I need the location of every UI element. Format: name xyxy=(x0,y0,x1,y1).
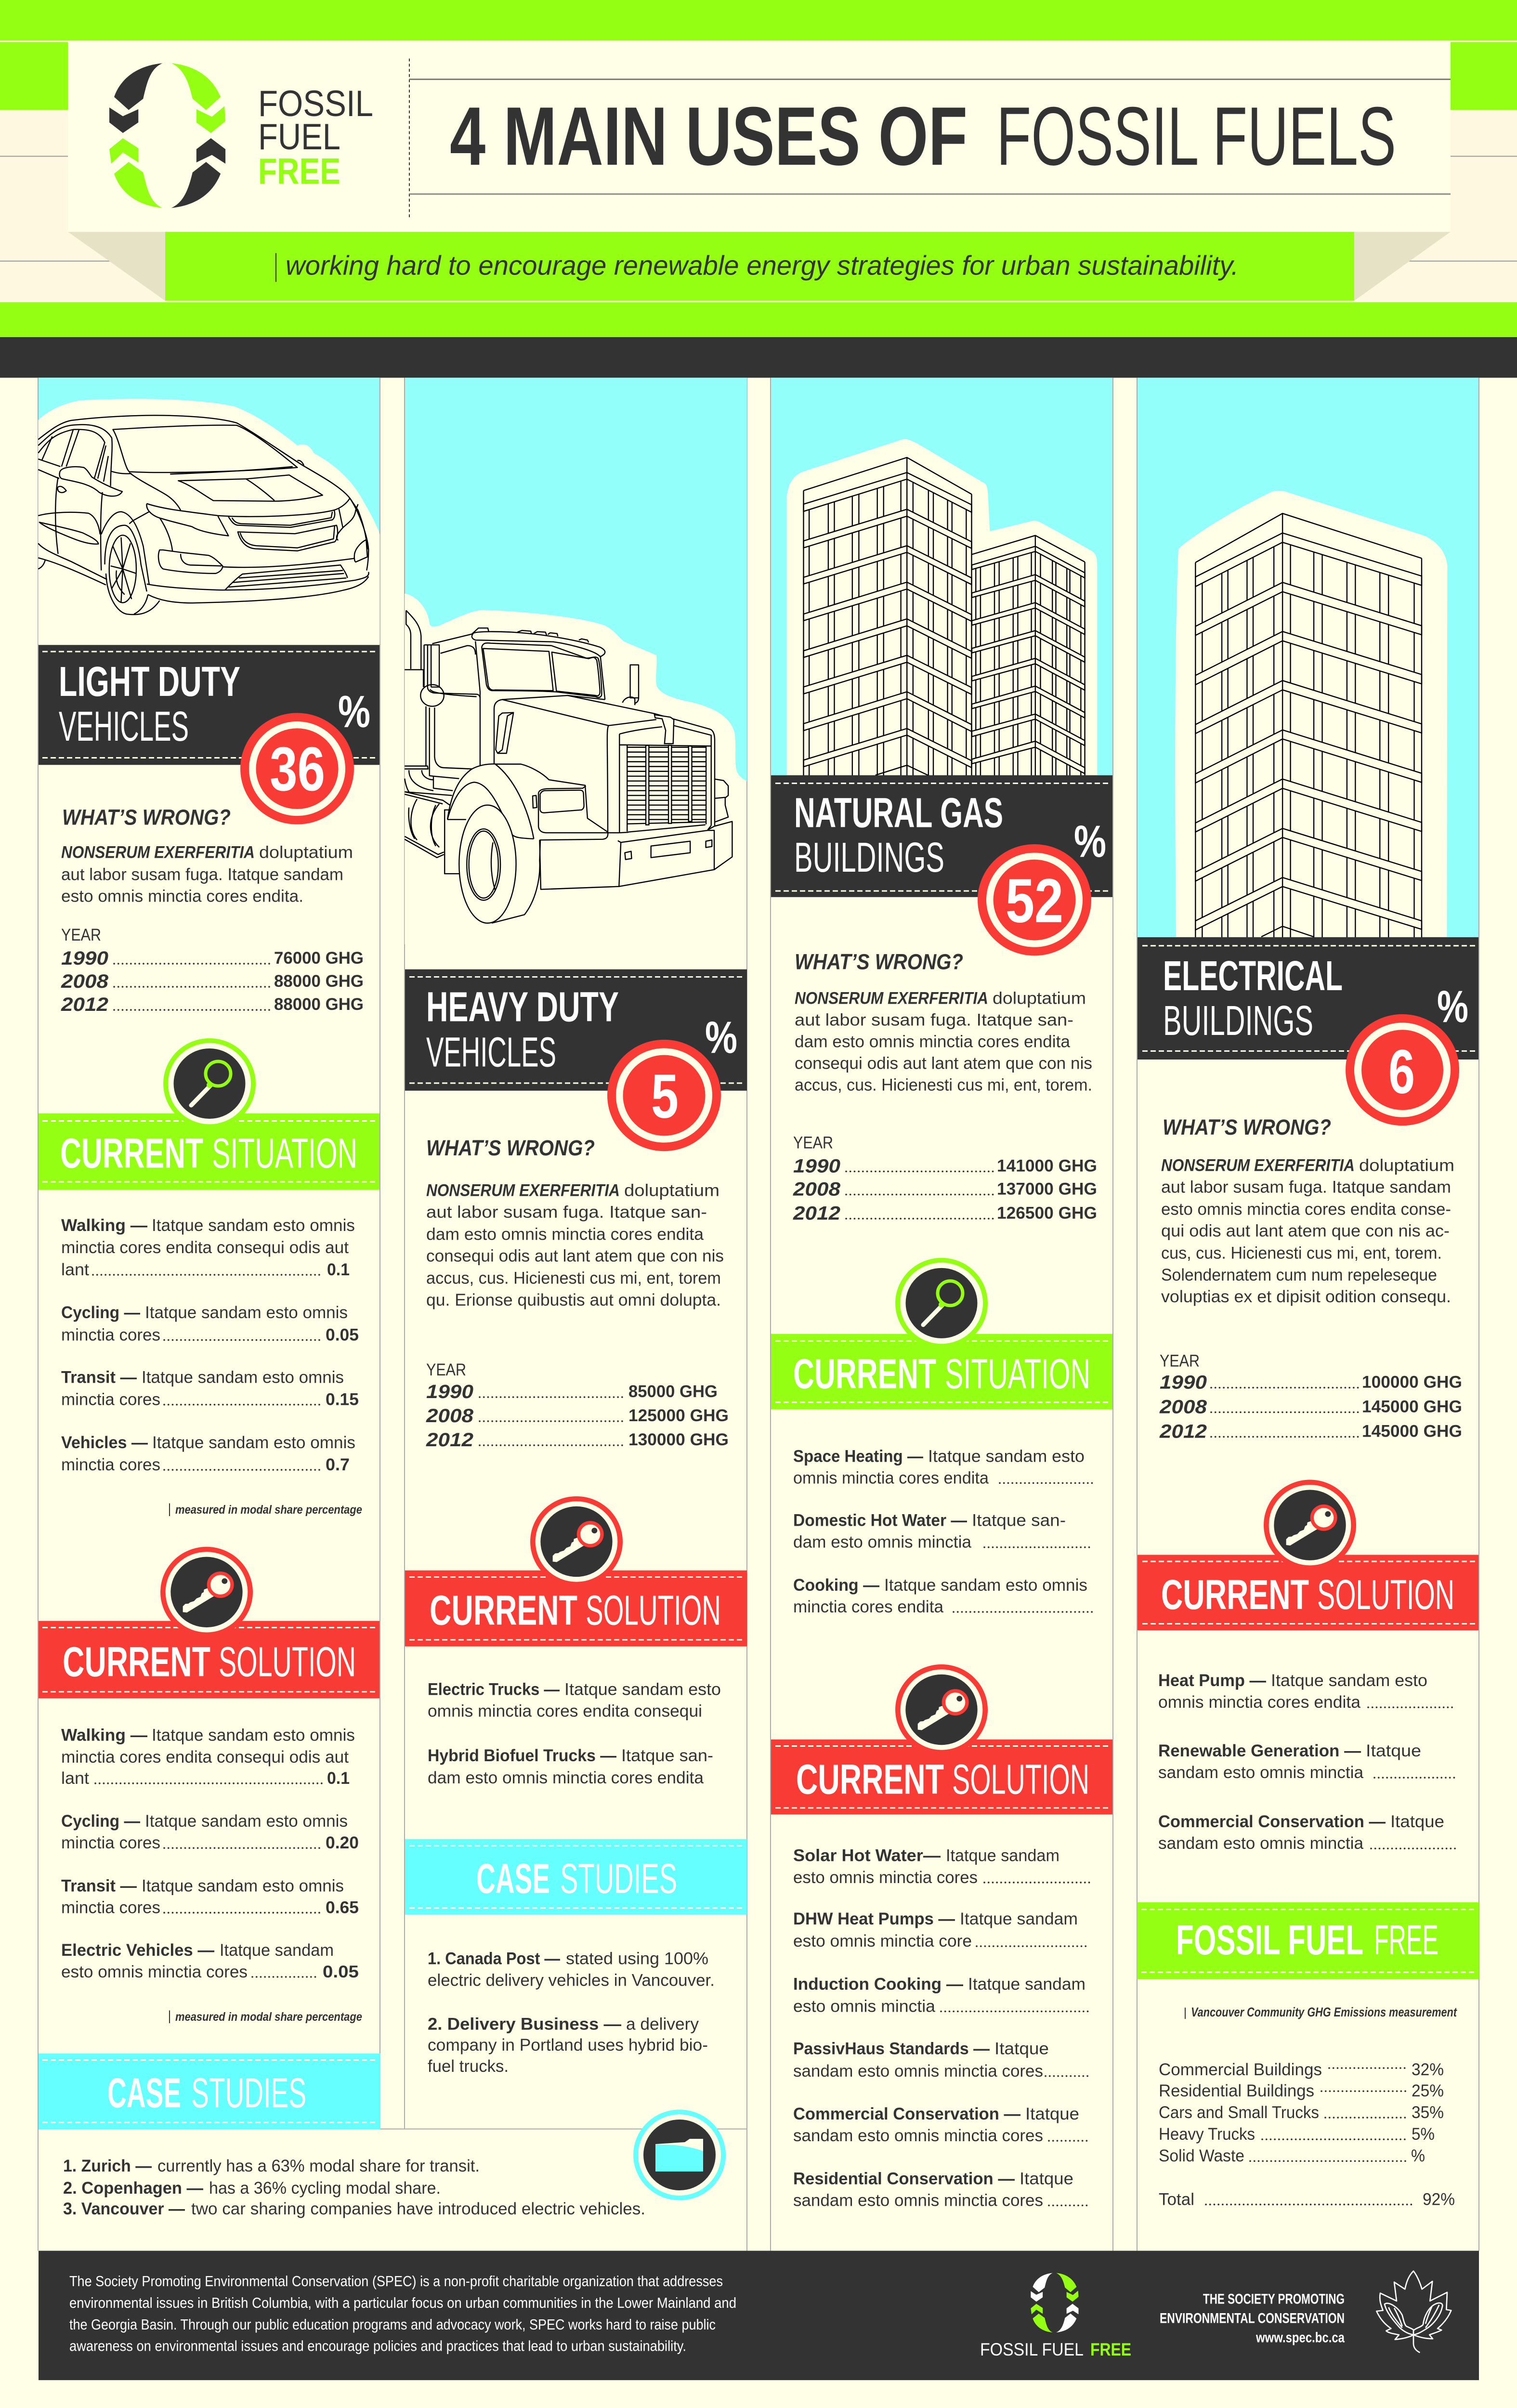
list: current situation: Transit — xyxy=(61,1368,137,1387)
text block: what's wrong: WHAT’S WRONG? xyxy=(1163,1115,1331,1139)
logo wordmark xyxy=(258,83,373,192)
footer text: about SPEC: awareness on environmental issues and encourage policies and practices that lead to urban sustainability. xyxy=(69,2338,686,2354)
footer organisation name: ENVIRONMENTAL CONSERVATION xyxy=(1160,2311,1345,2326)
list: current solution: Itatque sandam esto omnis xyxy=(152,1726,355,1745)
icon: maple leaf xyxy=(1376,2271,1451,2353)
note: emissions measurement: Vancouver Community GHG Emissions measurement xyxy=(1191,2005,1457,2019)
list: current solution: Commercial Conservation — xyxy=(1158,1812,1386,1831)
note: modal share: measured in modal share percentage xyxy=(175,1504,362,1517)
column borders xyxy=(38,378,1479,2251)
text block: what's wrong: aut labor susam fuga. Itatque san- xyxy=(426,1203,707,1221)
list: current situation: omnis minctia cores endita xyxy=(793,1468,989,1487)
table: GHG by year: YEAR xyxy=(426,1360,466,1379)
list: current situation: Cycling — xyxy=(61,1303,140,1322)
illustration: truck xyxy=(405,378,747,944)
text block: what's wrong: NONSERUM EXERFERITIA xyxy=(61,843,255,862)
list: current situation: Itatque san- xyxy=(972,1511,1066,1530)
stat: 36 percent xyxy=(240,713,354,824)
list: current solution: esto omnis minctia cores xyxy=(793,1868,978,1887)
table: GHG by year xyxy=(426,1360,729,1451)
footer text: about SPEC xyxy=(69,2273,736,2354)
stat: 52 percent xyxy=(978,844,1091,955)
list: current solution: 0.05 xyxy=(323,1962,359,1981)
heading banner: electrical buildings: BUILDINGS xyxy=(1163,997,1313,1044)
list: current situation: minctia cores xyxy=(61,1390,160,1409)
stat: 6 percent: 6 xyxy=(1388,1037,1415,1106)
list: current solution xyxy=(1158,1671,1457,1853)
list: current situation: Itatque sandam esto omnis xyxy=(142,1368,344,1387)
heading banner: heavy duty vehicles: HEAVY DUTY xyxy=(426,983,619,1030)
section heading: current situation xyxy=(771,1334,1112,1409)
section heading: fossil fuel free: FOSSIL FUEL xyxy=(1176,1916,1363,1963)
table: emissions shares: Total xyxy=(1159,2190,1194,2209)
table: GHG by year: 141000 GHG xyxy=(997,1156,1097,1175)
section heading: current solution xyxy=(39,1621,379,1698)
heading banner: natural gas buildings: % xyxy=(1074,816,1106,867)
list: current situation: 0.7 xyxy=(326,1455,350,1474)
icon: magnifier xyxy=(163,1038,256,1129)
list: current solution: Itatque sandam xyxy=(968,1975,1085,1993)
list: current solution: Itatque xyxy=(994,2039,1049,2058)
section heading: current solution: CURRENT xyxy=(1161,1571,1309,1618)
logo wordmark: FREE xyxy=(258,151,340,192)
table: GHG by year: 88000 GHG xyxy=(274,971,364,991)
heading banner: natural gas buildings: NATURAL GAS xyxy=(794,789,1003,836)
table: GHG by year: 2008 xyxy=(426,1404,473,1426)
list: current situation: minctia cores xyxy=(61,1325,160,1344)
list: current solution: Itatque sandam esto xyxy=(1271,1671,1427,1690)
tagline banner xyxy=(165,232,1354,301)
tagline banner: working hard to encourage renewable energy strategies for urban sustainability. xyxy=(286,250,1239,281)
section heading: current solution: CURRENT xyxy=(796,1755,944,1803)
list: current solution: Induction Cooking — xyxy=(793,1975,963,1993)
list: current solution: Transit — xyxy=(61,1876,137,1895)
panel: electrical buildings xyxy=(1137,378,1479,2209)
list: current situation: Itatque sandam esto omnis xyxy=(884,1575,1087,1595)
list: current solution: Itatque san- xyxy=(621,1746,713,1765)
list: current situation: Domestic Hot Water — xyxy=(793,1511,967,1530)
text block: what's wrong: WHAT’S WRONG? xyxy=(426,1136,595,1160)
icon: magnifier xyxy=(895,1258,988,1348)
list: case studies xyxy=(63,2156,645,2218)
list: current solution: PassivHaus Standards — xyxy=(793,2039,990,2058)
table: GHG by year: 125000 GHG xyxy=(628,1406,729,1425)
table: emissions shares: 5% xyxy=(1412,2124,1435,2144)
table: emissions shares: Residential Buildings xyxy=(1159,2081,1314,2100)
table: emissions shares: Commercial Buildings xyxy=(1159,2060,1322,2079)
icon: key xyxy=(530,1496,623,1587)
stat: 5 percent: 5 xyxy=(651,1061,679,1131)
footer wordmark: FOSSIL FUEL xyxy=(980,2340,1084,2359)
list: current solution: sandam esto omnis minctia cores xyxy=(793,2126,1043,2145)
list: current solution: Itatque xyxy=(1020,2169,1073,2188)
list: current situation: Itatque sandam esto omnis xyxy=(152,1216,355,1235)
table: GHG by year: 85000 GHG xyxy=(628,1382,718,1401)
table: emissions shares xyxy=(1159,2060,1455,2209)
panel: heavy duty vehicles xyxy=(405,378,747,2076)
logo: fossil fuel free xyxy=(109,63,373,208)
table: GHG by year: YEAR xyxy=(1160,1351,1200,1370)
list: current solution: Itatque sandam xyxy=(220,1940,334,1960)
table: GHG by year xyxy=(793,1133,1097,1224)
footer text: about SPEC: the Georgia Basin. Through our public education programs and advocacy work, SPEC works hard to raise public xyxy=(69,2316,716,2333)
icon: logo arrows xyxy=(109,63,225,208)
section heading: current solution xyxy=(405,1570,747,1647)
table: emissions shares: 35% xyxy=(1412,2103,1444,2122)
table: GHG by year: 145000 GHG xyxy=(1362,1397,1462,1416)
text block: what's wrong: NONSERUM EXERFERITIA xyxy=(795,989,988,1008)
section heading: current solution xyxy=(771,1740,1112,1815)
section heading: case studies: STUDIES xyxy=(560,1855,677,1902)
table: GHG by year: 2012 xyxy=(1159,1420,1207,1442)
text block: what's wrong: aut labor susam fuga. Itatque sandam xyxy=(61,865,343,884)
list: case studies: 2. Copenhagen — xyxy=(63,2178,203,2198)
footer xyxy=(39,2251,1479,2380)
table: GHG by year: 137000 GHG xyxy=(997,1179,1097,1198)
list: current solution: Itatque sandam esto omnis xyxy=(145,1811,348,1831)
text block: what's wrong: WHAT’S WRONG? xyxy=(62,805,231,830)
list: case studies: 1. Canada Post — xyxy=(428,1949,560,1968)
text block: what's wrong: cus, cus. Hicienesti cus mi, ent, torem. xyxy=(1161,1243,1442,1263)
list: current solution: Cycling — xyxy=(61,1811,140,1831)
illustration: tower xyxy=(1138,378,1478,938)
text block: what's wrong: qu. Erionse quibustis aut omni dolupta. xyxy=(426,1290,721,1309)
table: emissions shares: Cars and Small Trucks xyxy=(1159,2103,1319,2122)
list: current situation: Vehicles — xyxy=(61,1433,148,1452)
text block: what's wrong: doluptatium xyxy=(624,1181,719,1200)
list: current solution: sandam esto omnis minctia xyxy=(1158,1834,1363,1853)
list: current solution: sandam esto omnis minctia cores xyxy=(793,2061,1043,2081)
list: current solution xyxy=(793,1846,1090,2210)
list: current situation: lant xyxy=(61,1260,89,1279)
table: GHG by year: YEAR xyxy=(61,925,101,944)
text block: what's wrong: doluptatium xyxy=(993,989,1086,1008)
list: current situation: Cooking — xyxy=(793,1575,879,1595)
list: current situation: minctia cores xyxy=(61,1455,160,1474)
note: modal share second: measured in modal share percentage xyxy=(175,2011,362,2024)
footer text: about SPEC: The Society Promoting Environmental Conservation (SPEC) is a non-profit charitable organization that addresses xyxy=(69,2273,723,2290)
list: current solution: esto omnis minctia cores xyxy=(61,1962,248,1981)
list: case studies: stated using 100% xyxy=(566,1949,708,1968)
list: current solution: Itatque xyxy=(1390,1812,1444,1831)
list: current solution: Electric Vehicles — xyxy=(61,1940,214,1960)
icon: folder xyxy=(633,2109,726,2200)
list: current situation: Walking — xyxy=(61,1216,147,1235)
list: current solution: Itatque sandam xyxy=(960,1909,1078,1928)
list: current situation xyxy=(61,1216,359,1474)
list: current situation: minctia cores endita consequi odis aut xyxy=(61,1238,349,1257)
list: current situation xyxy=(793,1447,1092,1616)
list: current solution: lant xyxy=(61,1768,89,1788)
heading banner: heavy duty vehicles: VEHICLES xyxy=(426,1029,556,1076)
list: current solution: esto omnis minctia xyxy=(793,1997,935,2015)
list: current solution: Itatque sandam xyxy=(946,1846,1059,1865)
list: current solution: 0.1 xyxy=(327,1768,350,1788)
list: current solution: Solar Hot Water— xyxy=(793,1846,941,1865)
section heading: current solution: CURRENT xyxy=(63,1638,210,1685)
text block: what's wrong: consequi odis aut lant atem que con nis xyxy=(426,1246,724,1266)
table: GHG by year: 2012 xyxy=(426,1428,473,1451)
list: current solution: minctia cores xyxy=(61,1833,160,1852)
list: current solution: Itatque sandam esto xyxy=(564,1680,721,1699)
list: case studies: 1. Zurich — xyxy=(63,2156,152,2175)
table: GHG by year: 1990 xyxy=(61,947,108,969)
stat: 36 percent: 36 xyxy=(270,734,325,804)
list: current solution: Residential Conservation — xyxy=(793,2169,1015,2188)
table: GHG by year: 1990 xyxy=(1160,1371,1207,1393)
table: GHG by year: 1990 xyxy=(793,1155,840,1177)
text block: what's wrong: aut labor susam fuga. Itatque san- xyxy=(795,1010,1073,1029)
list: case studies: fuel trucks. xyxy=(428,2056,509,2076)
section heading: case studies: CASE xyxy=(107,2069,181,2116)
section heading: current solution: SOLUTION xyxy=(952,1755,1089,1803)
table: emissions shares: % xyxy=(1411,2146,1425,2165)
text block: what's wrong: NONSERUM EXERFERITIA xyxy=(1161,1156,1355,1175)
text block: what's wrong: voluptias ex et dipisit odition consequ. xyxy=(1161,1287,1451,1306)
text block: what's wrong xyxy=(61,805,353,905)
list: current situation: dam esto omnis minctia xyxy=(793,1532,971,1552)
heading banner: heavy duty vehicles xyxy=(405,969,747,1091)
table: emissions shares: Solid Waste xyxy=(1159,2146,1244,2165)
section heading: current solution: CURRENT xyxy=(430,1586,577,1634)
table: GHG by year: 100000 GHG xyxy=(1362,1373,1462,1391)
section heading: case studies xyxy=(405,1839,747,1914)
table: emissions shares: Heavy Trucks xyxy=(1159,2124,1255,2144)
footer organisation name xyxy=(1160,2291,1345,2346)
table: GHG by year: 2012 xyxy=(61,993,108,1015)
table: emissions shares: 32% xyxy=(1412,2060,1444,2079)
table: GHG by year: 130000 GHG xyxy=(628,1430,729,1449)
list: current solution: sandam esto omnis minctia xyxy=(1158,1763,1363,1782)
text block: what's wrong: esto omnis minctia cores endita. xyxy=(61,887,303,905)
heading banner: electrical buildings: ELECTRICAL xyxy=(1163,952,1343,999)
text block: what's wrong: accus, cus. Hicienesti cus mi, ent, torem xyxy=(426,1269,721,1288)
stat: 5 percent xyxy=(607,1040,721,1151)
text block: what's wrong: accus, cus. Hicienesti cus mi, ent, torem. xyxy=(795,1075,1092,1095)
section heading: current situation: SITUATION xyxy=(945,1350,1090,1397)
table: GHG by year: 2008 xyxy=(793,1178,840,1200)
list: current solution: minctia cores endita consequi odis aut xyxy=(61,1747,349,1767)
text block: what's wrong: NONSERUM EXERFERITIA xyxy=(426,1181,620,1200)
list: current solution: 0.20 xyxy=(326,1833,359,1852)
footer organisation name: www.spec.bc.ca xyxy=(1255,2330,1345,2346)
footer logo xyxy=(980,2273,1131,2359)
list: current solution: esto omnis minctia core xyxy=(793,1931,972,1950)
table: GHG by year xyxy=(61,925,364,1015)
list: current solution xyxy=(61,1726,359,1981)
section heading: case studies xyxy=(39,2054,380,2130)
table: GHG by year: 2008 xyxy=(1159,1396,1207,1417)
footer wordmark: FREE xyxy=(1090,2340,1131,2359)
table: GHG by year: 2012 xyxy=(793,1202,840,1224)
header band xyxy=(0,0,1517,378)
table: GHG by year: 1990 xyxy=(426,1380,473,1402)
section heading: current situation: CURRENT xyxy=(60,1129,203,1177)
list: case studies: has a 36% cycling modal share. xyxy=(209,2178,441,2198)
list: case studies: two car sharing companies have introduced electric vehicles. xyxy=(191,2199,645,2218)
panel: natural gas buildings xyxy=(771,378,1112,2210)
table: emissions shares: 25% xyxy=(1412,2081,1444,2100)
text block: what's wrong xyxy=(1161,1115,1454,1306)
list: current solution: omnis minctia cores endita consequi xyxy=(428,1701,702,1721)
list: current situation: 0.05 xyxy=(326,1325,359,1344)
list: current solution: Electric Trucks — xyxy=(428,1680,560,1699)
list: current situation: Itatque sandam esto omnis xyxy=(152,1433,355,1452)
section heading: fossil fuel free: FREE xyxy=(1374,1916,1439,1963)
list: current solution: Heat Pump — xyxy=(1158,1671,1266,1690)
list: case studies: 2. Delivery Business — xyxy=(428,2015,621,2034)
list: case studies xyxy=(428,1949,715,2076)
heading banner: heavy duty vehicles: % xyxy=(705,1012,737,1063)
footer text: about SPEC: environmental issues in British Columbia, with a particular focus on urban communities in the Lower Mainland and xyxy=(69,2294,736,2311)
section heading: current situation: SITUATION xyxy=(212,1129,357,1177)
heading banner: light duty vehicles: % xyxy=(338,687,370,737)
section heading: current situation xyxy=(39,1113,379,1190)
table: GHG by year xyxy=(1159,1351,1462,1442)
text block: what's wrong: Solendernatem cum num repeleseque xyxy=(1161,1265,1437,1284)
icon: key xyxy=(895,1664,988,1755)
section heading: case studies: CASE xyxy=(476,1855,550,1902)
list: current solution: DHW Heat Pumps — xyxy=(793,1909,955,1928)
icon: footer logo arrows xyxy=(1031,2273,1078,2332)
heading banner: natural gas buildings: BUILDINGS xyxy=(794,834,944,881)
list: current situation: Space Heating — xyxy=(793,1447,923,1466)
heading banner: light duty vehicles: VEHICLES xyxy=(59,703,189,750)
heading banner: electrical buildings xyxy=(1138,937,1478,1060)
list: current situation: 0.15 xyxy=(326,1390,359,1409)
list: current situation: 0.1 xyxy=(327,1260,350,1279)
table: GHG by year: 76000 GHG xyxy=(274,948,364,968)
list: current solution: Commercial Conservation — xyxy=(793,2104,1020,2123)
list: current solution: dam esto omnis minctia cores endita xyxy=(428,1768,704,1787)
logo wordmark: FUEL xyxy=(258,116,340,157)
list: case studies: company in Portland uses hybrid bio- xyxy=(428,2035,708,2055)
list: current solution: Walking — xyxy=(61,1726,147,1745)
text block: what's wrong: WHAT’S WRONG? xyxy=(795,950,963,974)
stat: 52 percent: 52 xyxy=(1006,866,1063,935)
list: case studies: a delivery xyxy=(626,2015,699,2034)
title: 4 MAIN USES OF xyxy=(450,90,968,183)
list: current solution: sandam esto omnis minctia cores xyxy=(793,2191,1043,2210)
section heading: current solution: SOLUTION xyxy=(219,1638,356,1685)
list: current situation: Itatque sandam esto xyxy=(928,1447,1085,1466)
heading banner: electrical buildings: % xyxy=(1437,982,1468,1032)
list: case studies: 3. Vancouver — xyxy=(63,2199,185,2218)
list: current solution: Itatque sandam esto omnis xyxy=(142,1876,344,1895)
stat: 6 percent xyxy=(1346,1014,1459,1125)
icon: key xyxy=(160,1547,253,1637)
list: current solution xyxy=(428,1680,721,1787)
list: case studies: currently has a 63% modal share for transit. xyxy=(157,2156,480,2175)
section heading: current situation: CURRENT xyxy=(793,1350,936,1397)
logo wordmark: FOSSIL xyxy=(258,83,373,124)
list: current solution: 0.65 xyxy=(326,1898,359,1917)
panel: light duty vehicles xyxy=(38,378,726,2218)
text block: what's wrong: consequi odis aut lant atem que con nis xyxy=(795,1054,1092,1073)
text block: what's wrong: esto omnis minctia cores endita conse- xyxy=(1161,1200,1451,1218)
text block: what's wrong: dam esto omnis minctia cores endita xyxy=(426,1225,704,1243)
section heading: current solution: SOLUTION xyxy=(586,1586,721,1634)
list: current solution: Renewable Generation — xyxy=(1158,1741,1361,1760)
heading banner: light duty vehicles: LIGHT DUTY xyxy=(59,658,240,705)
icon: key xyxy=(1264,1480,1356,1570)
text block: what's wrong: doluptatium xyxy=(1359,1156,1454,1175)
text block: what's wrong: dam esto omnis minctia cores endita xyxy=(795,1032,1070,1051)
list: current solution: Hybrid Biofuel Trucks — xyxy=(428,1746,616,1765)
list: current solution: omnis minctia cores endita xyxy=(1158,1692,1360,1712)
section heading: case studies: STUDIES xyxy=(191,2069,306,2116)
illustration: two towers xyxy=(771,378,1112,777)
text block: what's wrong: qui odis aut lant atem que con nis ac- xyxy=(1161,1221,1450,1241)
list: current solution: Itatque xyxy=(1366,1741,1421,1760)
table: GHG by year: 126500 GHG xyxy=(997,1204,1097,1222)
heading banner: light duty vehicles xyxy=(39,645,379,765)
list: current situation: minctia cores endita xyxy=(793,1597,943,1616)
footer organisation name: THE SOCIETY PROMOTING xyxy=(1203,2291,1345,2307)
table: GHG by year: 2008 xyxy=(61,970,108,992)
text block: what's wrong: doluptatium xyxy=(259,843,353,862)
illustration: car xyxy=(38,378,380,644)
section heading: current solution xyxy=(1138,1555,1478,1630)
section heading: fossil fuel free xyxy=(1137,1902,1479,1979)
list: current situation: Itatque sandam esto omnis xyxy=(145,1303,348,1322)
list: current solution: Itatque xyxy=(1025,2104,1079,2123)
list: case studies: electric delivery vehicles in Vancouver. xyxy=(428,1971,715,1989)
list: current solution: minctia cores xyxy=(61,1898,160,1917)
table: GHG by year: 145000 GHG xyxy=(1362,1422,1462,1440)
table: GHG by year: 88000 GHG xyxy=(274,995,364,1014)
heading banner: natural gas buildings xyxy=(771,775,1112,897)
text block: what's wrong xyxy=(795,950,1092,1095)
table: emissions shares: 92% xyxy=(1423,2190,1455,2209)
text block: what's wrong xyxy=(426,1136,724,1309)
table: GHG by year: YEAR xyxy=(793,1133,833,1152)
text block: what's wrong: aut labor susam fuga. Itatque sandam xyxy=(1161,1178,1451,1196)
